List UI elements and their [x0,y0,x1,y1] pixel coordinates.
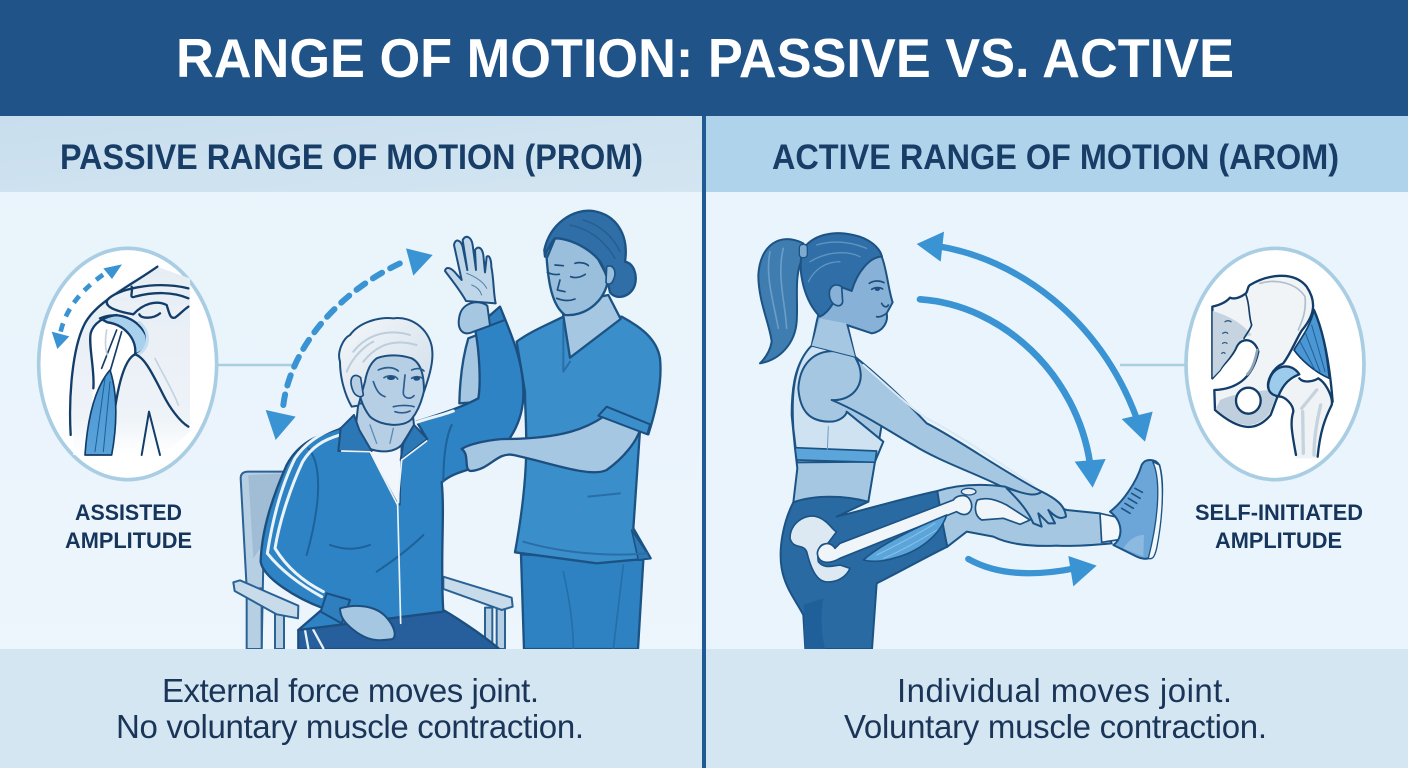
ear and face features [829,285,843,306]
patient hair [339,318,432,407]
heading: PROM: PASSIVE RANGE OF MOTION (PROM) [60,138,643,177]
leggings [781,491,947,649]
description text: External force moves joint. [162,672,539,709]
obturator foramen [1236,388,1261,414]
inset label: self-initiated: AMPLITUDE [1215,528,1342,553]
white tee [367,443,401,505]
panel header: active [705,116,1408,192]
footer: passive [0,649,703,768]
dashed arrow [52,264,122,349]
pelvis [1212,276,1313,427]
inset: hip joint [1186,248,1364,480]
patient jacket with raised arm [261,307,523,630]
inset label: assisted [65,500,192,553]
sports top [793,346,883,462]
connector: shoulder inset to patient [217,364,298,366]
inset label: self-initiated [1195,500,1363,553]
femur [1277,378,1332,458]
patient ear [351,375,363,397]
pubis [1216,390,1275,425]
nurse ear and features [606,266,615,284]
nurse pants [521,554,643,649]
nurse sleeve band [598,407,650,434]
patient features [373,368,424,413]
description text: Voluntary muscle contraction. [844,708,1267,745]
upper arm bone and joint [70,267,188,455]
kneecap [961,488,976,495]
patient cuff and hand [321,593,350,623]
nurse hand on wrist [459,302,490,333]
nurse left arm [459,333,485,403]
sacral holes [1222,321,1231,353]
inset label: assisted: AMPLITUDE [65,528,192,553]
neck and face [812,255,893,357]
description text: No voluntary muscle contraction. [116,708,584,745]
description text [844,672,1267,745]
illustration: woman performing active leg raise [758,232,1162,649]
panel header: passive [0,116,703,192]
heading: AROM: ACTIVE RANGE OF MOTION (AROM) [772,138,1339,177]
collar [338,415,427,460]
inset label: self-initiated: SELF-INITIATED [1195,500,1363,525]
inset label: assisted: ASSISTED [75,500,182,525]
inset: shoulder joint [39,248,217,480]
hair [801,233,882,317]
title: RANGE OF MOTION: PASSIVE VS. ACTIVE [176,27,1234,89]
femoral head [1268,366,1299,396]
title band [0,0,1408,116]
center divider [702,116,706,768]
sacrum [1213,311,1252,378]
dashed arc arrow [266,248,433,440]
illustration: therapist and patient [233,211,661,649]
hip and femur bones [790,516,850,582]
patient cuff on raised arm [475,307,505,330]
swing arrow [968,556,1097,586]
description text [116,672,584,745]
torso skin [792,313,883,502]
description text: Individual moves joint. [897,672,1232,709]
muscle [863,515,947,561]
nurse right forearm and hand [462,416,641,472]
patient neck [356,403,414,451]
sock [1100,513,1123,542]
ponytail [758,239,803,363]
arm [832,357,1066,527]
nurse hair [544,211,636,297]
nurse neck [562,295,621,358]
biceps muscle [85,370,116,455]
gluteal muscle [1294,310,1329,378]
patient pants [298,610,499,649]
zipper [342,441,427,623]
patient face [358,350,427,425]
tibia [975,499,1030,524]
footer: active [705,649,1408,768]
upper arc arrow [917,232,1153,442]
hand over leg [1007,488,1066,527]
nurse face [547,238,608,315]
nurse scrub top [515,317,661,563]
shoe [1110,460,1162,559]
jacket stripes [267,411,453,597]
connector: hip inset to leg [1120,364,1186,366]
lower arc arrow [920,299,1106,488]
patient raised hand [445,237,496,303]
chair [233,472,513,649]
acromion [107,285,188,318]
lower leg skin [937,485,1112,547]
